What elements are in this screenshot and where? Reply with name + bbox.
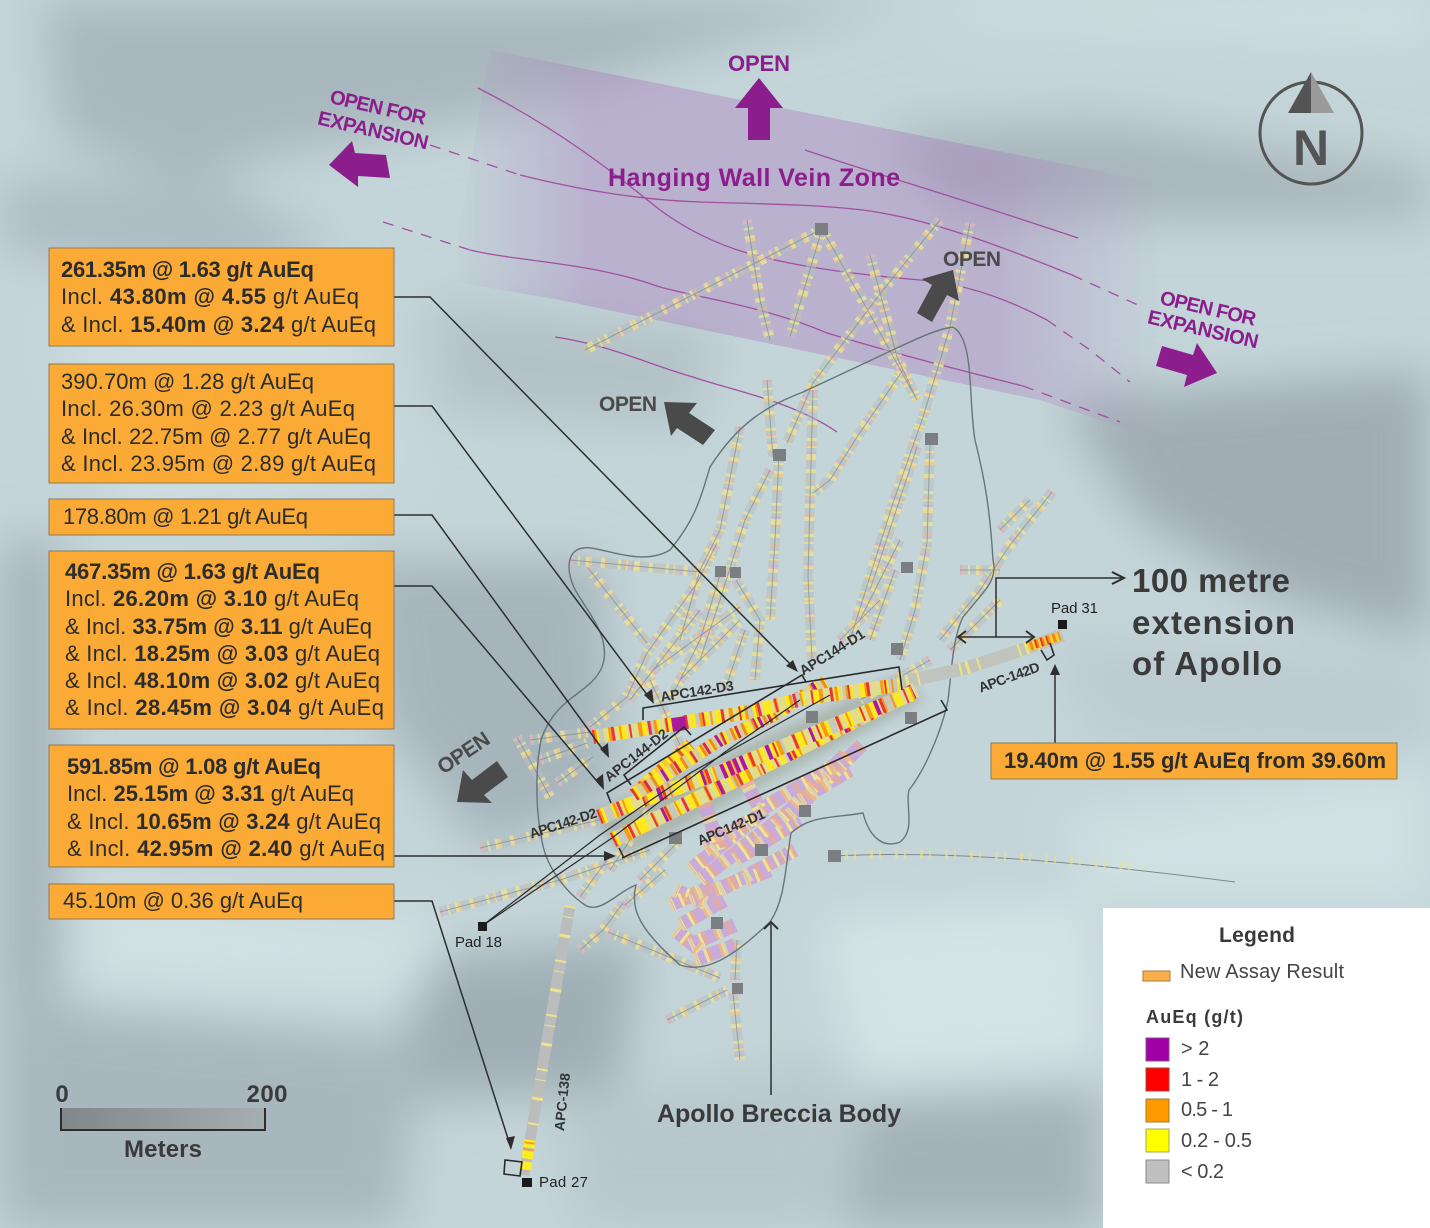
callout: APC142-D1 result: & Incl. 42.95m @ 2.40 g/t AuEq <box>67 836 385 861</box>
heading: 100 metre extension: of Apollo <box>1132 645 1282 682</box>
callout: APC142-D3 result: 390.70m @ 1.28 g/t AuEq <box>61 369 314 394</box>
open for expansion west label and arrow: EXPANSION <box>315 108 431 154</box>
legend: new assay result: New Assay Result <box>1180 961 1344 983</box>
leader arrows from callouts <box>394 297 1124 1148</box>
legend panel <box>1103 908 1430 1228</box>
faint historic drill holes <box>440 220 1052 1060</box>
pad 18 to target trace lines <box>482 695 830 926</box>
callout: APC142-D1 result: Incl. 25.15m @ 3.31 g/t AuEq <box>67 781 354 806</box>
heading: 100 metre extension <box>1132 562 1295 682</box>
open southwest label and arrow <box>433 727 508 803</box>
heading: Hanging Wall Vein Zone: Hanging Wall Vein Zone <box>608 164 900 192</box>
hole labels: APC142-D1 <box>695 805 767 848</box>
drill hole APC142-D3 <box>593 685 899 737</box>
callout: APC142-D2 result <box>49 551 394 729</box>
hole labels <box>527 626 1042 1132</box>
interval brackets <box>504 643 1054 1176</box>
hanging wall vein zone band <box>450 50 1165 442</box>
apollo breccia outline <box>537 327 994 967</box>
open north label and arrow <box>728 51 790 140</box>
callout: APC142-D1 result: 591.85m @ 1.08 g/t AuEq <box>67 754 321 779</box>
callout: APC142-D3 result <box>49 364 394 483</box>
callout: APC-142D result: 19.40m @ 1.55 g/t AuEq from 39.60m <box>1004 748 1386 773</box>
open northeast label and arrow: OPEN <box>943 248 1001 271</box>
hole labels: APC142-D3 <box>659 677 735 705</box>
legend: colour scale: < 0.2 <box>1181 1161 1224 1183</box>
open for expansion west label and arrow <box>315 86 431 187</box>
callout: APC144-D1 result <box>49 248 394 346</box>
callout: APC142-D2 result: & Incl. 18.25m @ 3.03 g/t AuEq <box>65 641 380 666</box>
open for expansion west label and arrow: OPEN FOR <box>328 86 429 130</box>
callout: APC144-D1 result: & Incl. 15.40m @ 3.24 g/t AuEq <box>61 312 376 337</box>
purple vein traces <box>383 88 1138 432</box>
callout: APC144-D1 result: Incl. 43.80m @ 4.55 g/t AuEq <box>61 284 359 309</box>
open for expansion east label and arrow <box>1145 287 1261 387</box>
callout: APC-138 result <box>49 884 394 919</box>
callout: APC142-D1 result <box>49 745 394 867</box>
long drill trace east <box>834 854 1235 882</box>
open northeast label and arrow <box>917 248 1001 322</box>
hole labels: APC144-D1 <box>796 626 868 678</box>
legend panel: AuEq (g/t) <box>1146 1007 1243 1027</box>
drill hole APC142-D1 <box>613 690 916 840</box>
open northwest label and arrow <box>599 393 715 445</box>
drill hole APC144-D2 <box>634 745 691 795</box>
open northwest label and arrow: OPEN <box>599 393 657 416</box>
pad markers and labels <box>455 600 1098 1191</box>
callout: APC142-D1 result: & Incl. 10.65m @ 3.24 g/t AuEq <box>67 809 381 834</box>
callout: APC144-D1 result: 261.35m @ 1.63 g/t AuEq <box>61 257 314 282</box>
hole labels: APC144-D2 <box>601 725 671 785</box>
hole labels: APC142-D2 <box>527 805 599 841</box>
north arrow compass: N <box>1293 120 1329 176</box>
drill hole APC144-D1 <box>634 682 826 795</box>
callout: APC142-D3 result: & Incl. 22.75m @ 2.77 g/t AuEq <box>61 424 371 449</box>
hole labels: APC-138 <box>551 1072 573 1132</box>
heading: 100 metre extension: 100 metre <box>1132 562 1290 599</box>
drill hole APC142-D2 <box>599 693 913 817</box>
drill hole APC-142D <box>899 635 1063 683</box>
callout: APC142-D2 result: 467.35m @ 1.63 g/t AuEq <box>65 559 320 584</box>
pad markers and labels: Pad 31 <box>1051 600 1098 617</box>
hole labels: APC-142D <box>976 659 1042 695</box>
callout: APC142-D2 result: Incl. 26.20m @ 3.10 g/t AuEq <box>65 586 359 611</box>
callout: APC142-D2 result: & Incl. 28.45m @ 3.04 g/t AuEq <box>65 695 384 720</box>
callout: APC144-D2 result: 178.80m @ 1.21 g/t AuEq <box>63 504 308 529</box>
legend: colour scale: 1 - 2 <box>1181 1069 1219 1091</box>
scale bar: Meters <box>124 1136 202 1163</box>
leader arrowheads <box>506 660 1060 1150</box>
north arrow compass <box>1260 72 1362 184</box>
pad markers and labels: Pad 27 <box>539 1174 588 1191</box>
drill hole APC-138 <box>524 906 570 1175</box>
open for expansion east label and arrow: OPEN FOR <box>1158 287 1259 331</box>
collar markers <box>669 223 938 994</box>
open southwest label and arrow: OPEN <box>433 727 494 779</box>
open for expansion east label and arrow: EXPANSION <box>1145 307 1261 353</box>
soft shading under target drill holes <box>590 675 925 858</box>
callout: APC-138 result: 45.10m @ 0.36 g/t AuEq <box>63 888 303 913</box>
callout: APC-142D result <box>991 743 1397 779</box>
open north label and arrow: OPEN <box>728 51 790 76</box>
callout: APC142-D3 result: Incl. 26.30m @ 2.23 g/t AuEq <box>61 396 355 421</box>
pad markers and labels: Pad 18 <box>455 934 502 951</box>
heading: 100 metre extension: extension <box>1132 604 1295 641</box>
scale bar <box>55 1081 288 1163</box>
callout: APC142-D2 result: & Incl. 33.75m @ 3.11 g/t AuEq <box>65 614 372 639</box>
legend: colour scale: > 2 <box>1181 1038 1209 1060</box>
purple assay cluster <box>670 745 862 960</box>
legend panel: Legend <box>1219 924 1295 947</box>
legend: colour scale: 0.5 - 1 <box>1181 1099 1233 1121</box>
callout: APC142-D2 result: & Incl. 48.10m @ 3.02 g/t AuEq <box>65 668 380 693</box>
scale bar: 0 <box>55 1081 69 1108</box>
legend: colour scale: 0.2 - 0.5 <box>1181 1130 1252 1152</box>
scale bar: 200 <box>246 1081 288 1108</box>
legend: colour scale <box>1146 1038 1252 1183</box>
heading: Apollo Breccia Body: Apollo Breccia Body <box>657 1100 901 1128</box>
callout: APC142-D3 result: & Incl. 23.95m @ 2.89 g/t AuEq <box>61 451 376 476</box>
callout: APC144-D2 result <box>49 499 394 535</box>
